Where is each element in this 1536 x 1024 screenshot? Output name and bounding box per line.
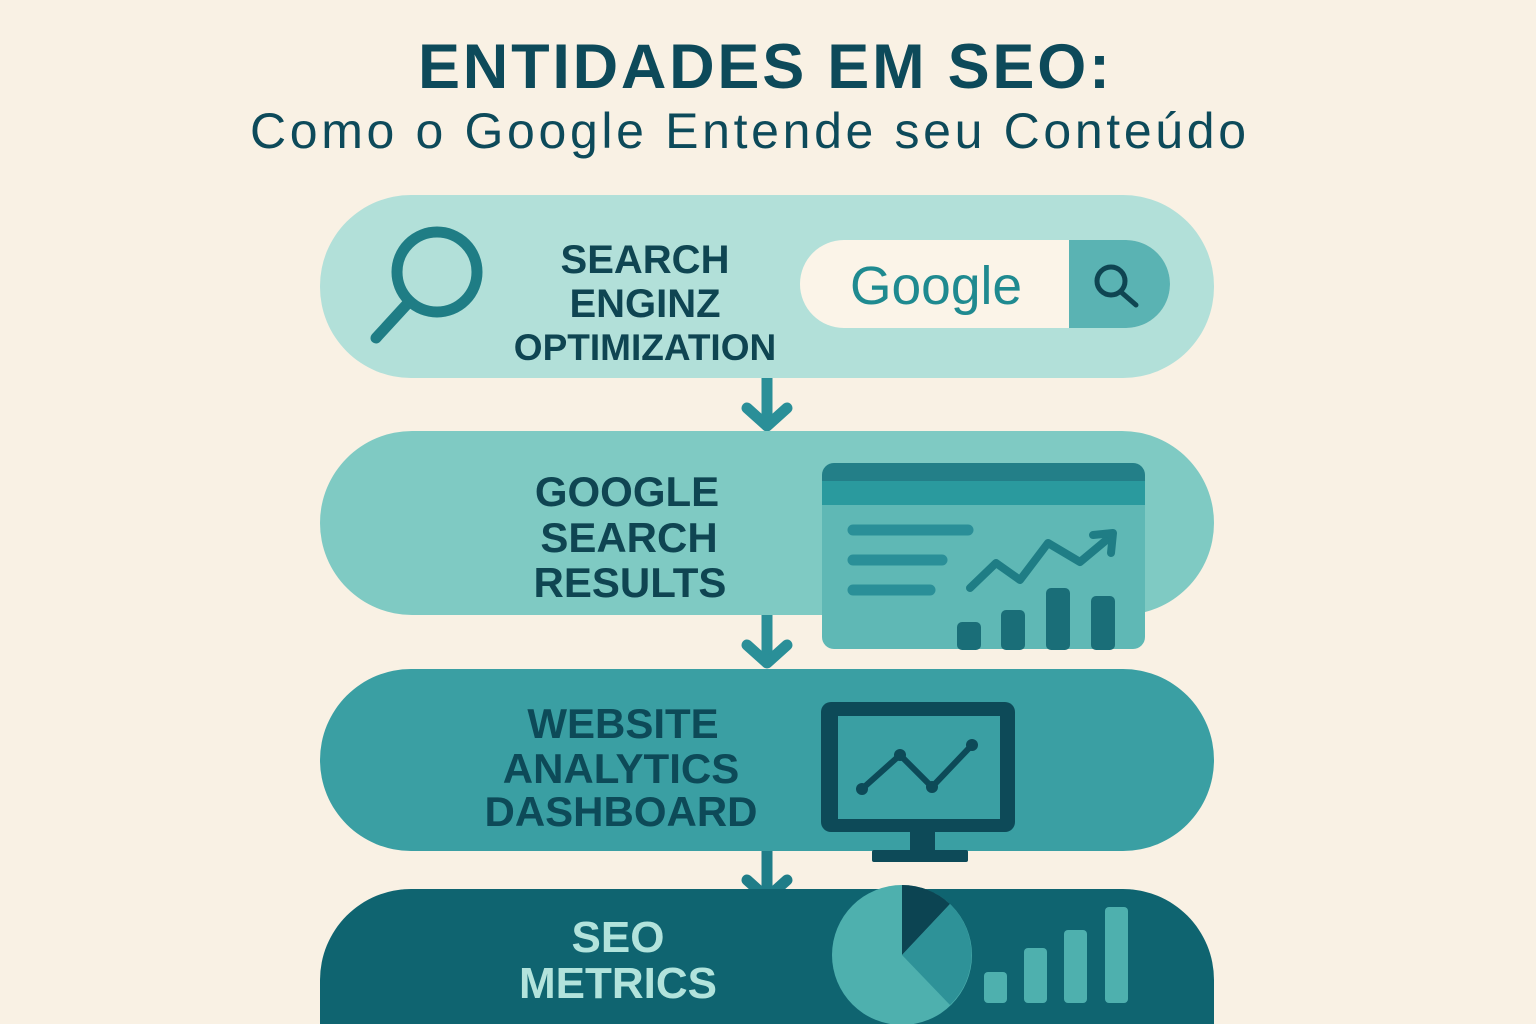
arrow 1 xyxy=(747,378,787,426)
icon: bar chart xyxy=(984,907,1128,1003)
icon: magnifier xyxy=(376,232,477,338)
arrow 2 xyxy=(747,615,787,663)
text: seo metrics xyxy=(519,913,717,1008)
text: website analytics dashboard: WEBSITE xyxy=(527,700,719,747)
text: search enginz optimization: OPTIMIZATION xyxy=(514,327,776,368)
icon: monitor xyxy=(821,702,1015,862)
icon: pie chart xyxy=(832,885,972,1024)
text: search enginz optimization: SEARCH xyxy=(561,238,729,282)
text: google search results: RESULTS xyxy=(534,559,726,606)
text: google search results: SEARCH xyxy=(540,514,718,561)
panel: search engine optimization xyxy=(320,195,1214,378)
icon: results browser with chart xyxy=(822,463,1145,650)
panel: google search results xyxy=(320,431,1214,650)
title xyxy=(250,32,1246,159)
search box: Google xyxy=(850,256,1022,316)
text: search enginz optimization: ENGINZ xyxy=(569,282,721,326)
text: website analytics dashboard xyxy=(484,700,758,835)
text: website analytics dashboard: DASHBOARD xyxy=(484,788,758,835)
text: seo metrics: SEO xyxy=(572,913,664,962)
search box xyxy=(800,240,1170,328)
text: seo metrics: METRICS xyxy=(519,959,717,1008)
arrow 3 xyxy=(747,851,787,898)
text: search enginz optimization xyxy=(514,238,776,368)
text: google search results: GOOGLE xyxy=(535,468,719,515)
text: website analytics dashboard: ANALYTICS xyxy=(503,745,739,792)
panel: seo metrics xyxy=(320,885,1214,1024)
subtitle: Como o Google Entende seu Conteúdo xyxy=(250,103,1246,159)
title: ENTIDADES EM SEO: xyxy=(418,32,1110,102)
panel: website analytics dashboard xyxy=(320,669,1214,862)
text: google search results xyxy=(534,468,726,606)
